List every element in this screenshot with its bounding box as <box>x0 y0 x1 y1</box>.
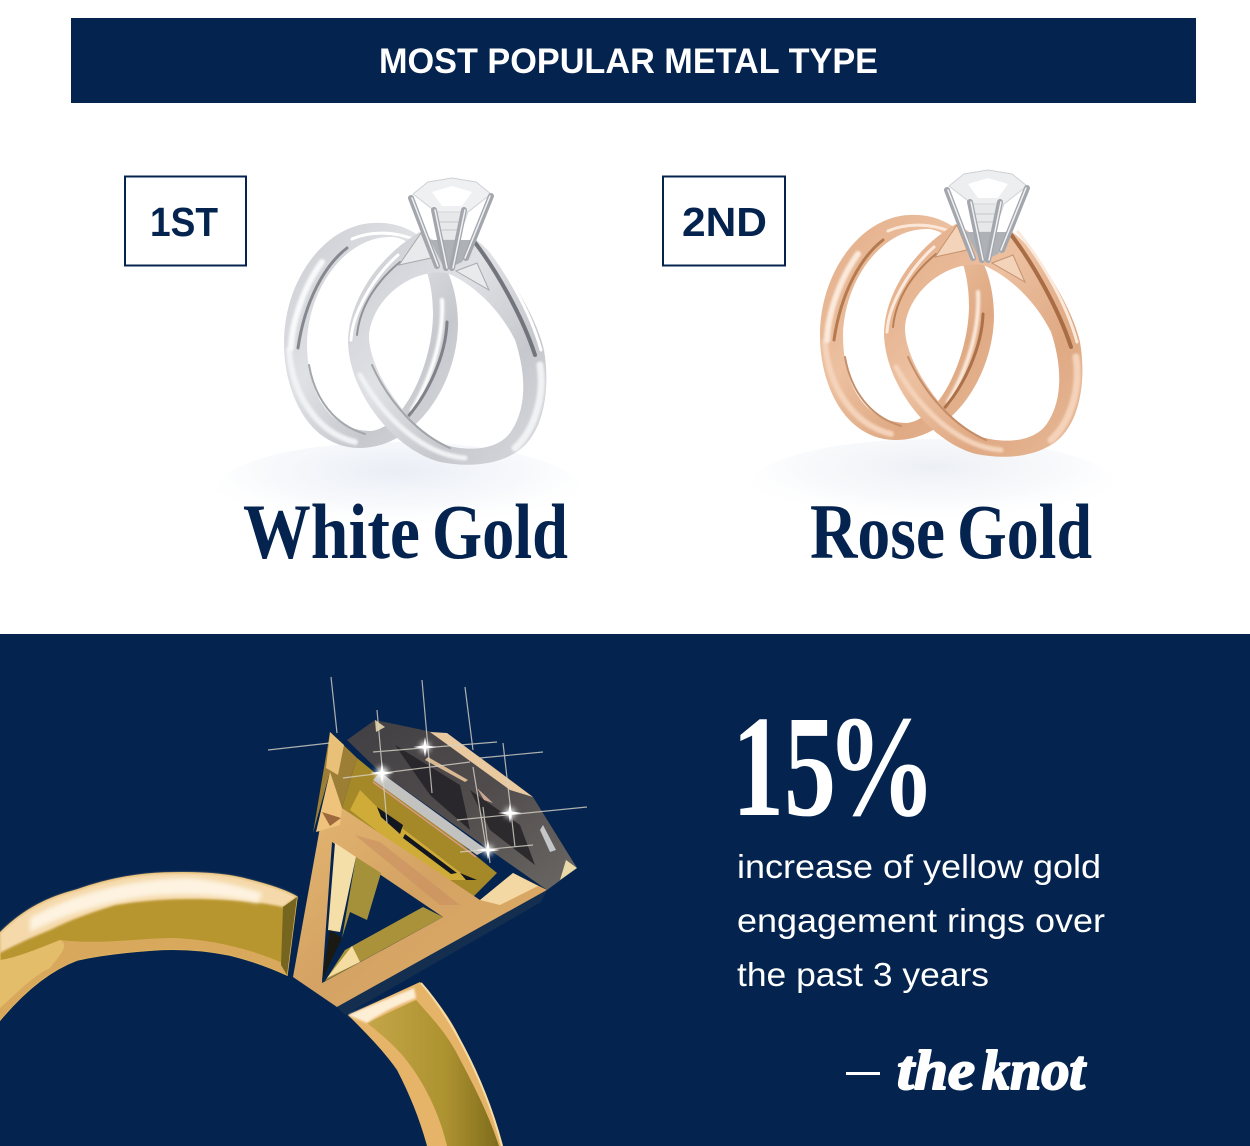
floor reflection white gold <box>216 442 580 538</box>
ring head <box>293 732 547 1015</box>
panel: yellow gold stat <box>0 634 1250 1146</box>
attribution dash <box>846 1072 880 1075</box>
stat description: engagement rings over <box>737 902 1105 939</box>
ring band left <box>0 873 297 1020</box>
icon: rose gold rings <box>820 170 1082 457</box>
header banner <box>71 18 1196 103</box>
gemstone <box>347 720 577 890</box>
stat description: increase of yellow gold <box>737 848 1101 885</box>
stat 15 percent: 15 <box>732 687 836 847</box>
ring band right <box>348 982 503 1146</box>
logo: the knot: the <box>897 1040 975 1102</box>
rank badge 2nd <box>663 176 785 266</box>
panel: rose gold <box>663 170 1115 575</box>
stat description: the past 3 years <box>737 956 989 993</box>
sparkle glows <box>370 737 522 860</box>
stat description <box>737 848 1105 993</box>
photo: yellow gold ring <box>0 677 587 1146</box>
rank badge 2nd: 2ND <box>682 199 767 245</box>
sparkles <box>268 677 587 863</box>
floor reflection rose gold <box>751 439 1115 531</box>
logo: the knot <box>897 1040 1086 1102</box>
stat 15 percent: % <box>826 686 936 847</box>
logo: the knot: knot <box>982 1040 1086 1102</box>
rank badge 1st <box>125 176 246 266</box>
header title: MOST POPULAR METAL TYPE <box>379 42 878 81</box>
panel: white gold <box>125 176 580 575</box>
label white gold <box>243 488 568 575</box>
label rose gold: Gold <box>957 488 1092 575</box>
label white gold: Gold <box>432 488 568 575</box>
rank badge 1st: 1ST <box>150 199 218 245</box>
label rose gold: Rose <box>810 488 945 575</box>
label white gold: White <box>243 488 420 575</box>
icon: white gold rings <box>284 178 546 465</box>
label rose gold <box>810 488 1092 575</box>
